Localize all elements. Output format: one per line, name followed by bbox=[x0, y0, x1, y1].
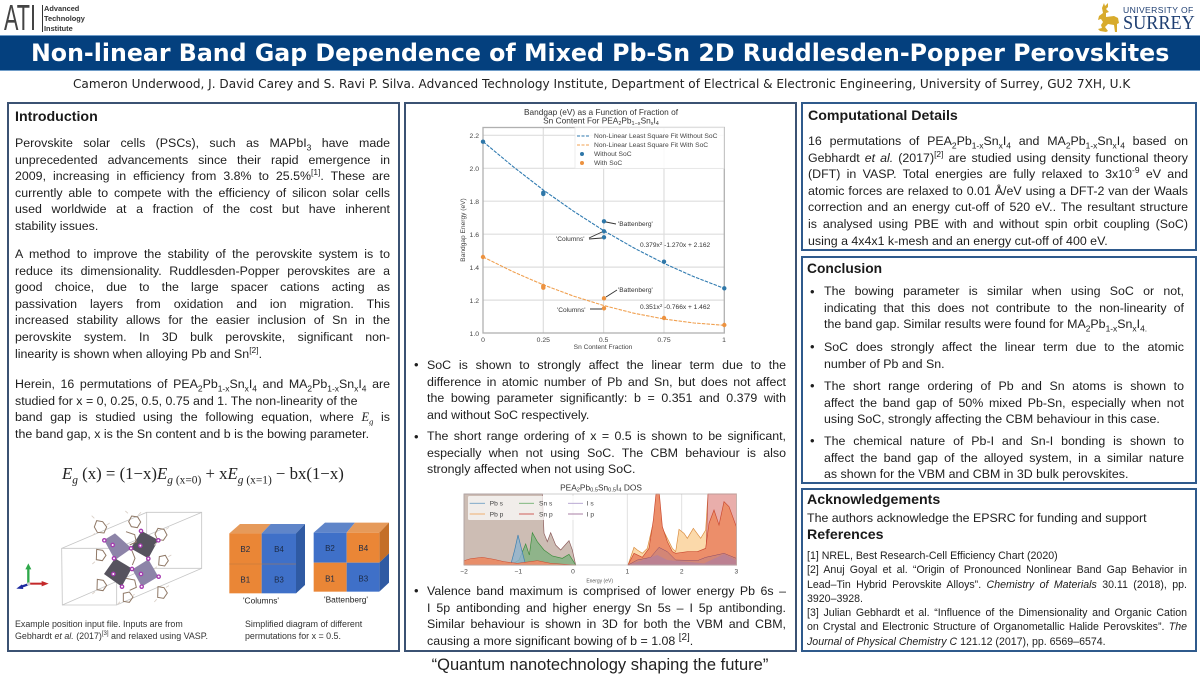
diagram: battenberg bbox=[314, 523, 389, 605]
chart: bandgap vs Sn content: 2.2 bbox=[470, 133, 479, 140]
text: permutations: studied for x = 0, 0.25, 0.5, 0.75 and 1. The non-linearity of the bbox=[15, 394, 357, 408]
chart: density of states: Sn s bbox=[539, 501, 553, 508]
chart: bandgap vs Sn content: 1.8 bbox=[470, 199, 479, 206]
chart: bandgap vs Sn content: 0.379x bbox=[640, 242, 660, 249]
chart: bandgap vs Sn content: 2.0 bbox=[470, 166, 479, 173]
logo: University of Surrey: UNIVERSITY OF bbox=[1123, 5, 1194, 15]
chart: density of states: 2 bbox=[577, 488, 580, 494]
bullet list: conclusions: The bowing parameter is similar when using SoC or not, bbox=[824, 284, 1184, 298]
chart: density of states: Pb p bbox=[490, 511, 504, 518]
text: dimensionality: good choice, due to the large spacer cations acting as bbox=[15, 280, 390, 294]
bullet list: conclusions bbox=[810, 284, 1184, 481]
text: dimensionality: reduce its dimensionality. Ruddlesden-Popper perovskites are a bbox=[15, 264, 390, 278]
chart: density of states: 4 bbox=[618, 488, 622, 494]
list: references bbox=[807, 550, 1187, 648]
text: perovskite solar cells: used worldwide at a fraction of the cost but have inherent bbox=[15, 202, 390, 216]
chart: bandgap vs Sn content: 1.2 bbox=[470, 298, 479, 305]
list: references: [3] Julian Gebhardt et al. “Influence of the Dimensionality and Organic Cation bbox=[807, 607, 1187, 619]
logo: Advanced Technology Institute: Technology bbox=[44, 14, 85, 23]
chart: density of states: I s bbox=[587, 501, 594, 508]
chart: bandgap vs Sn content: Bandgap (eV) as a Function of Fraction of bbox=[524, 107, 679, 117]
title banner: Non-linear Band Gap Dependence of Mixed Pb-Sn 2D Ruddlesden-Popper Perovskites bbox=[31, 39, 1169, 67]
bullet list: conclusions: SoC does strongly affect the linear term due to the atomic bbox=[824, 340, 1184, 354]
bullet list: conclusions: • bbox=[810, 433, 815, 448]
list: references: [2] Anuj Goyal et al. “Origin of Pronounced Nonlinear Band Gap Behavior in bbox=[807, 564, 1187, 576]
chart: bandgap vs Sn content: 'Columns' bbox=[557, 307, 586, 314]
text: computational details: atomic forces are relaxed to 0.01 Å/eV using a DFT-2 van der Waals bbox=[808, 184, 1188, 198]
chart: bandgap vs Sn content: x bbox=[651, 121, 654, 127]
diagram: battenberg: 'Battenberg' bbox=[324, 595, 368, 605]
list: references: Journal of Physical Chemistry C 121.12 (2017), pp. 6569–6574. bbox=[807, 636, 1106, 648]
footer tagline: “Quantum nanotechnology shaping the future” bbox=[432, 656, 768, 674]
bullet list: conclusions: • bbox=[810, 339, 815, 354]
bullet list: SoC and ordering: difference in atomic number of Pb and Sn, but does not affect bbox=[427, 375, 786, 389]
figure: crystal and cube diagrams bbox=[16, 510, 389, 606]
text: computational details: correction and an energy cut-off of 520 eV.. The resultant structure bbox=[808, 200, 1188, 214]
text: computational details: using a 4x4x1 k-mesh and an energy cut-off of 400 eV. bbox=[808, 234, 1108, 248]
diagram: columns: 'Columns' bbox=[243, 595, 279, 605]
bullet list: conclusions: The short range ordering of Pb and Sn atoms is shown to bbox=[824, 379, 1184, 393]
text: permutations: the band gap, x is the Sn content and b is the bowing parameter. bbox=[15, 427, 369, 441]
panel: bandgap results bbox=[404, 102, 797, 652]
chart: density of states: Sn p bbox=[539, 511, 553, 518]
chart: density of states: 0.5 bbox=[590, 488, 598, 494]
bullet list: SoC and ordering: The short range ordering of x = 0.5 is shown to be significant, bbox=[427, 429, 786, 443]
bullet list: conclusions: • bbox=[810, 284, 815, 299]
bullet list: SoC and ordering bbox=[414, 357, 786, 476]
chart: bandgap vs Sn content: 1 bbox=[722, 337, 726, 344]
chart: bandgap vs Sn content: I bbox=[653, 116, 656, 126]
chart: bandgap vs Sn content: Non-Linear Least Square Fit Without SoC bbox=[594, 133, 718, 140]
chart: bandgap vs Sn content: -0.766x + 1.462 bbox=[662, 304, 711, 311]
chart: density of states: I bbox=[616, 482, 618, 492]
chart: density of states: Pb bbox=[580, 482, 590, 492]
diagram: battenberg: B1 bbox=[325, 575, 335, 584]
text: perovskite solar cells: unprecedented advancements since their rapid emergence in bbox=[15, 153, 390, 167]
icon: crystal structure bbox=[62, 511, 202, 605]
chart: bandgap vs Sn content: -1.270x + 2.162 bbox=[662, 242, 711, 249]
list: references: [1] NREL, Best Research-Cell Efficiency Chart (2020) bbox=[807, 550, 1058, 562]
bullet: valence band maximum: • bbox=[414, 583, 419, 598]
logo: Advanced Technology Institute: Advanced bbox=[44, 4, 79, 13]
text: dimensionality bbox=[15, 247, 390, 361]
chart: bandgap vs Sn content: 0.25 bbox=[537, 337, 550, 344]
chart: bandgap vs Sn content: Without SoC bbox=[594, 151, 632, 158]
heading: introduction: Introduction bbox=[15, 109, 98, 125]
chart: bandgap vs Sn content: 1.6 bbox=[470, 232, 479, 239]
bullet list: conclusions: using SoC, strongly affecting the CBM behaviour in this case. bbox=[824, 412, 1160, 426]
chart: bandgap vs Sn content: 0.75 bbox=[657, 337, 671, 344]
heading: conclusion: Conclusion bbox=[807, 261, 882, 276]
chart: density of states: Sn bbox=[598, 482, 609, 492]
text: dimensionality: A method to improve the stability of the perovskite system is to bbox=[15, 247, 390, 261]
chart: bandgap vs Sn content: Sn bbox=[641, 116, 651, 126]
chart: bandgap vs Sn content: Bandgap Energy (eV) bbox=[460, 198, 467, 262]
logo: Advanced Technology Institute bbox=[4, 0, 85, 38]
caption: position input file: Example position input file. Inputs are from bbox=[15, 619, 183, 629]
bullet list: conclusions: affect the band gap of 50% mixed Pb-Sn, especially when not bbox=[824, 396, 1184, 410]
chart: bandgap vs Sn content: 2 bbox=[660, 241, 663, 246]
chart: bandgap vs Sn content: 'Battenberg' bbox=[618, 287, 653, 294]
chart: bandgap vs Sn content: 1.4 bbox=[470, 265, 479, 272]
text: computational details bbox=[808, 134, 1188, 248]
chart: density of states bbox=[460, 482, 738, 584]
chart: density of states: I p bbox=[587, 511, 594, 518]
equation: band gap bowing: Eg (x) = (1−x)Eg (x=0) + xEg (x=1) − bx(1−x) bbox=[62, 464, 344, 486]
chart: bandgap vs Sn content: 'Columns' bbox=[556, 236, 585, 243]
bullet list: SoC and ordering: especially when not using SoC. The CBM behaviour is also bbox=[427, 446, 786, 460]
bullet list: conclusions: number of Pb and Sn. bbox=[824, 357, 945, 371]
bullet list: SoC and ordering: strongly affected when not using SoC. bbox=[427, 462, 635, 476]
chart: bandgap vs Sn content: 0 bbox=[481, 337, 485, 344]
text: dimensionality: increased stability allows for the easier inclusion of Sn in the bbox=[15, 313, 390, 327]
chart: density of states: 2 bbox=[680, 568, 684, 575]
heading: references: References bbox=[807, 527, 884, 543]
bullet list: SoC and ordering: SoC is shown to strongly affect the linear term due to the bbox=[427, 358, 786, 372]
chart: bandgap vs Sn content: 2 bbox=[618, 121, 621, 127]
chart: density of states: Pb s bbox=[490, 501, 504, 508]
bullet: valence band maximum: I 5p antibonding and higher energy Sn 5s – I 5p antibonding. bbox=[427, 601, 786, 615]
bullet: valence band maximum bbox=[414, 583, 786, 648]
panel: acknowledgements and references bbox=[801, 488, 1197, 652]
heading: acknowledgements: Acknowledgements bbox=[807, 492, 940, 508]
authors: Cameron Underwood, J. David Carey and S. Ravi P. Silva. Advanced Technology Institute, Department of Electrical & Electronic Engineering, University of Surrey, GU2 7XH, U.K bbox=[73, 77, 1130, 91]
diagram: columns bbox=[229, 524, 305, 605]
text: computational details: is analysed using PBE with and without spin orbit coupling (SoC) bbox=[808, 217, 1188, 231]
chart: density of states: −2 bbox=[460, 568, 468, 575]
bullet: valence band maximum: Similar behaviour is shown in 3D for both the VBM and CBM, bbox=[427, 617, 786, 631]
bullet list: conclusions: • bbox=[810, 378, 815, 393]
list: references: 3920–3928. bbox=[807, 593, 863, 605]
chart: bandgap vs Sn content: 1.0 bbox=[470, 331, 479, 338]
chart: bandgap vs Sn content: 0.5 bbox=[599, 337, 609, 344]
text: perovskite solar cells: stability issues. bbox=[15, 219, 98, 233]
chart: density of states: 3 bbox=[734, 568, 738, 575]
diagram: battenberg: B2 bbox=[325, 544, 335, 553]
logo: Advanced Technology Institute: Institute bbox=[44, 24, 73, 33]
chart: density of states: 0 bbox=[571, 568, 575, 575]
bullet list: conclusions: as shown for the VBM and CBM in 3D bulk perovskites. bbox=[824, 467, 1128, 481]
caption: position input file: Gebhardt et al. (2017)[3] and relaxed using VASP. bbox=[15, 630, 208, 640]
bullet list: conclusions: affect the band gap of the alloyed system, in a similar nature bbox=[824, 451, 1184, 465]
chart: density of states: −1 bbox=[515, 568, 522, 575]
chart: bandgap vs Sn content: 4 bbox=[656, 121, 659, 127]
diagram: columns: B3 bbox=[274, 576, 284, 585]
text: dimensionality: passivation layers from oxidation and ion migration. This bbox=[15, 297, 390, 311]
chart: bandgap vs Sn content: 'Battenberg' bbox=[618, 221, 653, 228]
bullet list: SoC and ordering: • bbox=[414, 357, 419, 372]
heading: computational details: Computational Details bbox=[808, 108, 958, 124]
text: permutations bbox=[15, 377, 390, 441]
logo: University of Surrey bbox=[1098, 3, 1195, 34]
list: references: Lead–Tin Hybrid Perovskite Alloys”. Chemistry of Materials 30.11 (2018), pp. bbox=[807, 579, 1187, 591]
bullet list: SoC and ordering: the bowing parameter significantly: b = 0.351 and 0.379 with bbox=[427, 391, 786, 405]
diagram: battenberg: B3 bbox=[358, 575, 369, 584]
diagram: columns: B1 bbox=[240, 576, 251, 585]
chart: bandgap vs Sn content: 0.351x bbox=[640, 304, 660, 311]
chart: bandgap vs Sn content: Pb bbox=[621, 116, 632, 126]
caption: simplified diagram bbox=[245, 619, 362, 641]
icon: axes bbox=[16, 563, 49, 589]
diagram: columns: B4 bbox=[274, 545, 284, 554]
bullet list: SoC and ordering: • bbox=[414, 429, 419, 444]
text: perovskite solar cells: currently able to compete with the efficiency of silicon solar cells bbox=[15, 186, 390, 200]
chart: bandgap vs Sn content: 2 bbox=[660, 303, 663, 308]
list: references: on Crystal and Electronic Structure of Organometallic Halide Perovskites”. The bbox=[807, 621, 1187, 633]
diagram: columns: B2 bbox=[240, 545, 251, 554]
caption: simplified diagram: permutations for x = 0.5. bbox=[245, 630, 341, 640]
text: dimensionality: perovskite system. In 3D bulk perovskite, significant non- bbox=[15, 330, 390, 344]
chart: bandgap vs Sn content: Sn Content For PEA bbox=[543, 116, 618, 126]
chart: density of states: 1 bbox=[625, 568, 629, 575]
caption: position input file bbox=[15, 619, 208, 641]
caption: simplified diagram: Simplified diagram of different bbox=[245, 619, 362, 629]
panel: computational details bbox=[801, 102, 1197, 251]
text: perovskite solar cells bbox=[15, 136, 390, 233]
chart: bandgap vs Sn content: With SoC bbox=[594, 160, 622, 167]
chart: density of states: PEA bbox=[560, 482, 577, 492]
bullet list: conclusions: The chemical nature of Pb-I and Sn-I bonding is shown to bbox=[824, 434, 1184, 448]
chart: bandgap vs Sn content bbox=[460, 107, 726, 350]
chart: density of states: 0.5 bbox=[608, 488, 616, 494]
bullet: valence band maximum: Valence band maximum is comprised of lower energy Pb 6s – bbox=[427, 584, 786, 598]
logo: University of Surrey: SURREY bbox=[1123, 12, 1195, 34]
bullet list: SoC and ordering: and without SoC respectively. bbox=[427, 408, 589, 422]
diagram: battenberg: B4 bbox=[358, 544, 369, 553]
text: acknowledgement: The authors acknowledge the EPSRC for funding and support bbox=[807, 511, 1147, 525]
panel: conclusion bbox=[801, 256, 1197, 484]
chart: bandgap vs Sn content: 1−x bbox=[632, 121, 641, 127]
bullet list: conclusions: indicating that this does not contribute to the non-linearity of bbox=[824, 301, 1184, 315]
panel: introduction bbox=[7, 102, 400, 652]
chart: density of states: DOS bbox=[622, 482, 642, 492]
chart: bandgap vs Sn content: Non-Linear Least Square Fit With SoC bbox=[594, 142, 708, 149]
